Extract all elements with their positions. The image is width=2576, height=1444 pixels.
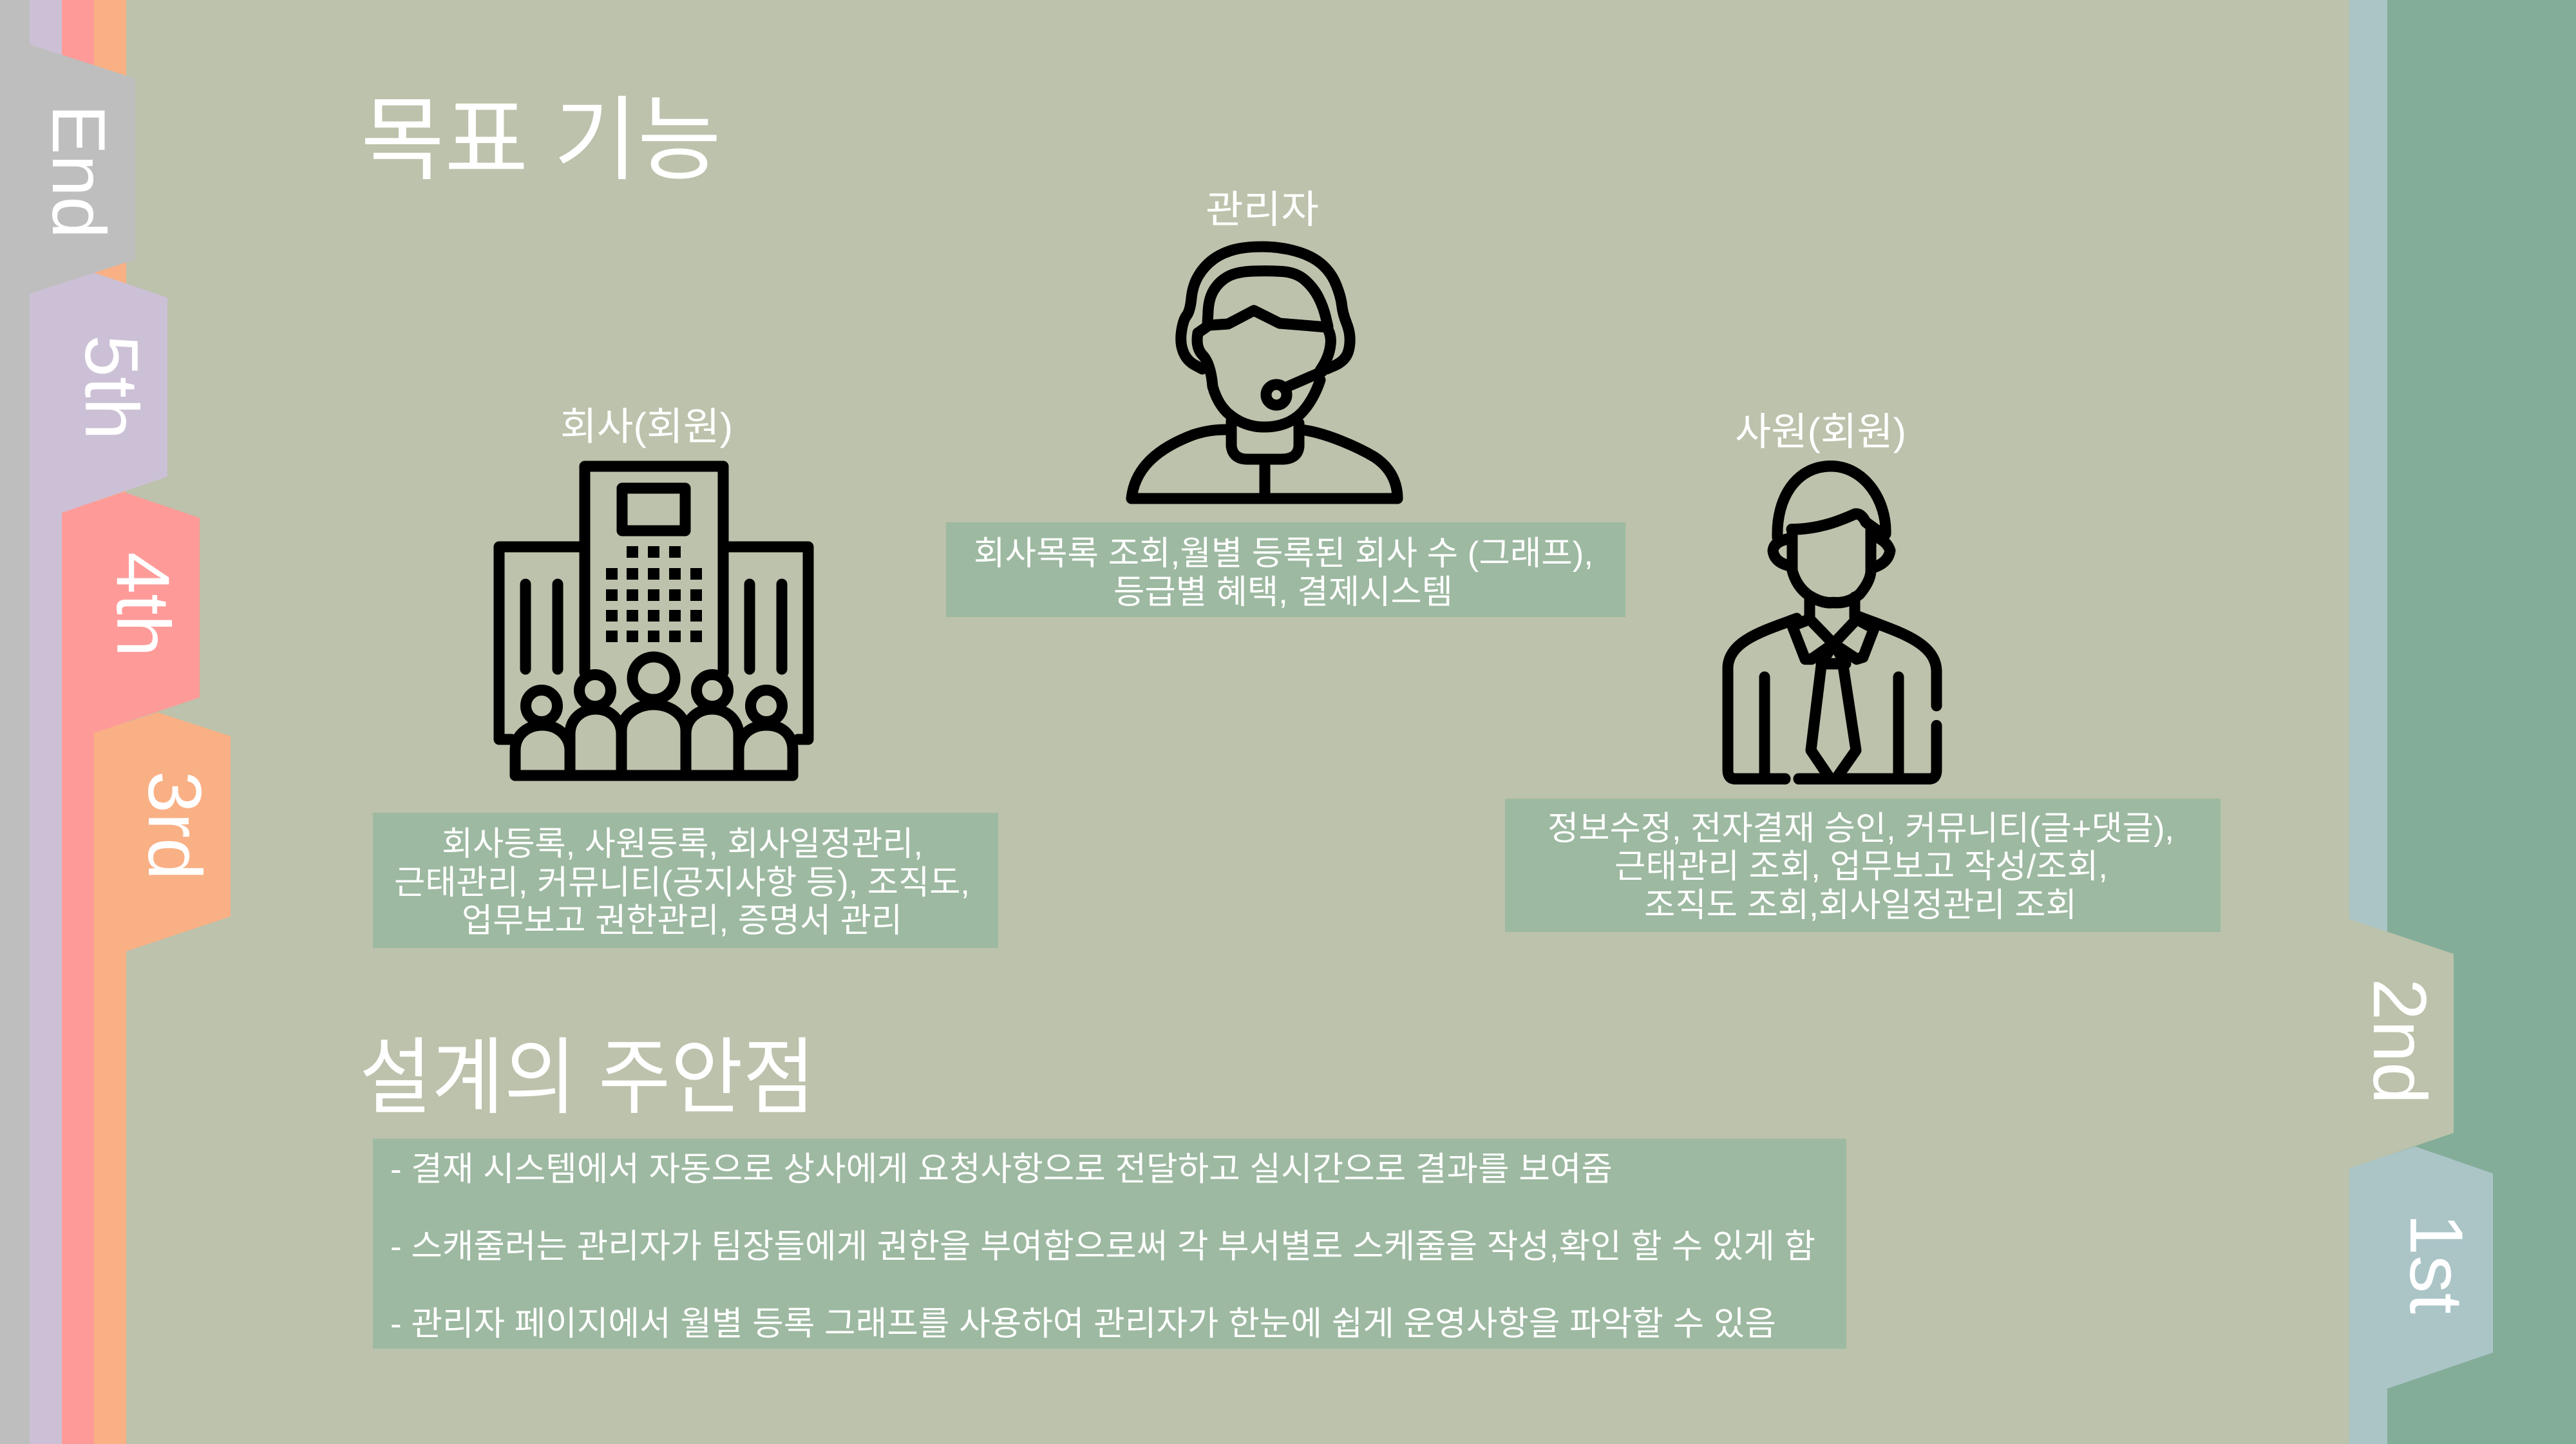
tab: 2nd: 2nd (2358, 978, 2442, 1104)
note: admin graph: - 관리자 페이지에서 월별 등록 그래프를 사용하여 관리자가 한눈에 쉽게 운영사항을 파악할 수 있음 (390, 1306, 1776, 1343)
icon: company building with people (499, 466, 808, 775)
company feature text: 업무보고 권한관리, 증명서 관리 (462, 902, 902, 940)
tab: 4th (62, 492, 200, 733)
employee feature text: 조직도 조회,회사일정관리 조회 (1644, 887, 2077, 924)
tab: 5th: 5th (70, 335, 154, 440)
company feature text: 회사등록, 사원등록, 회사일정관리, (442, 826, 923, 863)
tab: 4th: 4th (101, 552, 185, 657)
label: employee member: 사원(회원) (1735, 410, 1906, 453)
administrator feature text: 회사목록 조회,월별 등록된 회사 수 (그래프), (974, 535, 1593, 573)
administrator feature text: 등급별 혜택, 결제시스템 (1113, 574, 1453, 611)
employee feature text: 근태관리 조회, 업무보고 작성/조회, (1615, 848, 2108, 886)
panel: company features (373, 813, 998, 948)
employee feature text (1548, 810, 2174, 924)
note: approval system: - 결재 시스템에서 자동으로 상사에게 요청사항으로 전달하고 실시간으로 결과를 보여줌 (390, 1151, 1613, 1188)
heading: target features: 목표 기능 (361, 90, 721, 192)
tab: 1st: 1st (2394, 1213, 2479, 1314)
tab: End: End (37, 104, 121, 238)
tab: 3rd (94, 712, 231, 951)
tab: 5th (30, 272, 167, 513)
icon: administrator with headset (1132, 247, 1397, 499)
panel: employee features (1505, 799, 2221, 932)
tab: 1st (2387, 1146, 2493, 1389)
label: company member: 회사(회원) (560, 405, 733, 448)
tab: 3rd: 3rd (133, 771, 217, 880)
panel: administrator features (946, 522, 1625, 617)
note: scheduler: - 스캐줄러는 관리자가 팀장들에게 권한을 부여함으로써 각 부서별로 스케줄을 작성,확인 할 수 있게 함 (390, 1228, 1815, 1266)
icon: employee with tie (1728, 466, 1937, 779)
label: administrator: 관리자 (1206, 188, 1319, 231)
heading: design considerations: 설계의 주안점 (359, 1031, 815, 1125)
tab: End (30, 44, 135, 294)
company feature text (394, 826, 970, 940)
panel: design notes (373, 1139, 1846, 1349)
administrator feature text (974, 535, 1593, 611)
tab: 2nd (2349, 919, 2454, 1168)
company feature text: 근태관리, 커뮤니티(공지사항 등), 조직도, (394, 864, 970, 902)
employee feature text: 정보수정, 전자결재 승인, 커뮤니티(글+댓글), (1548, 810, 2174, 848)
